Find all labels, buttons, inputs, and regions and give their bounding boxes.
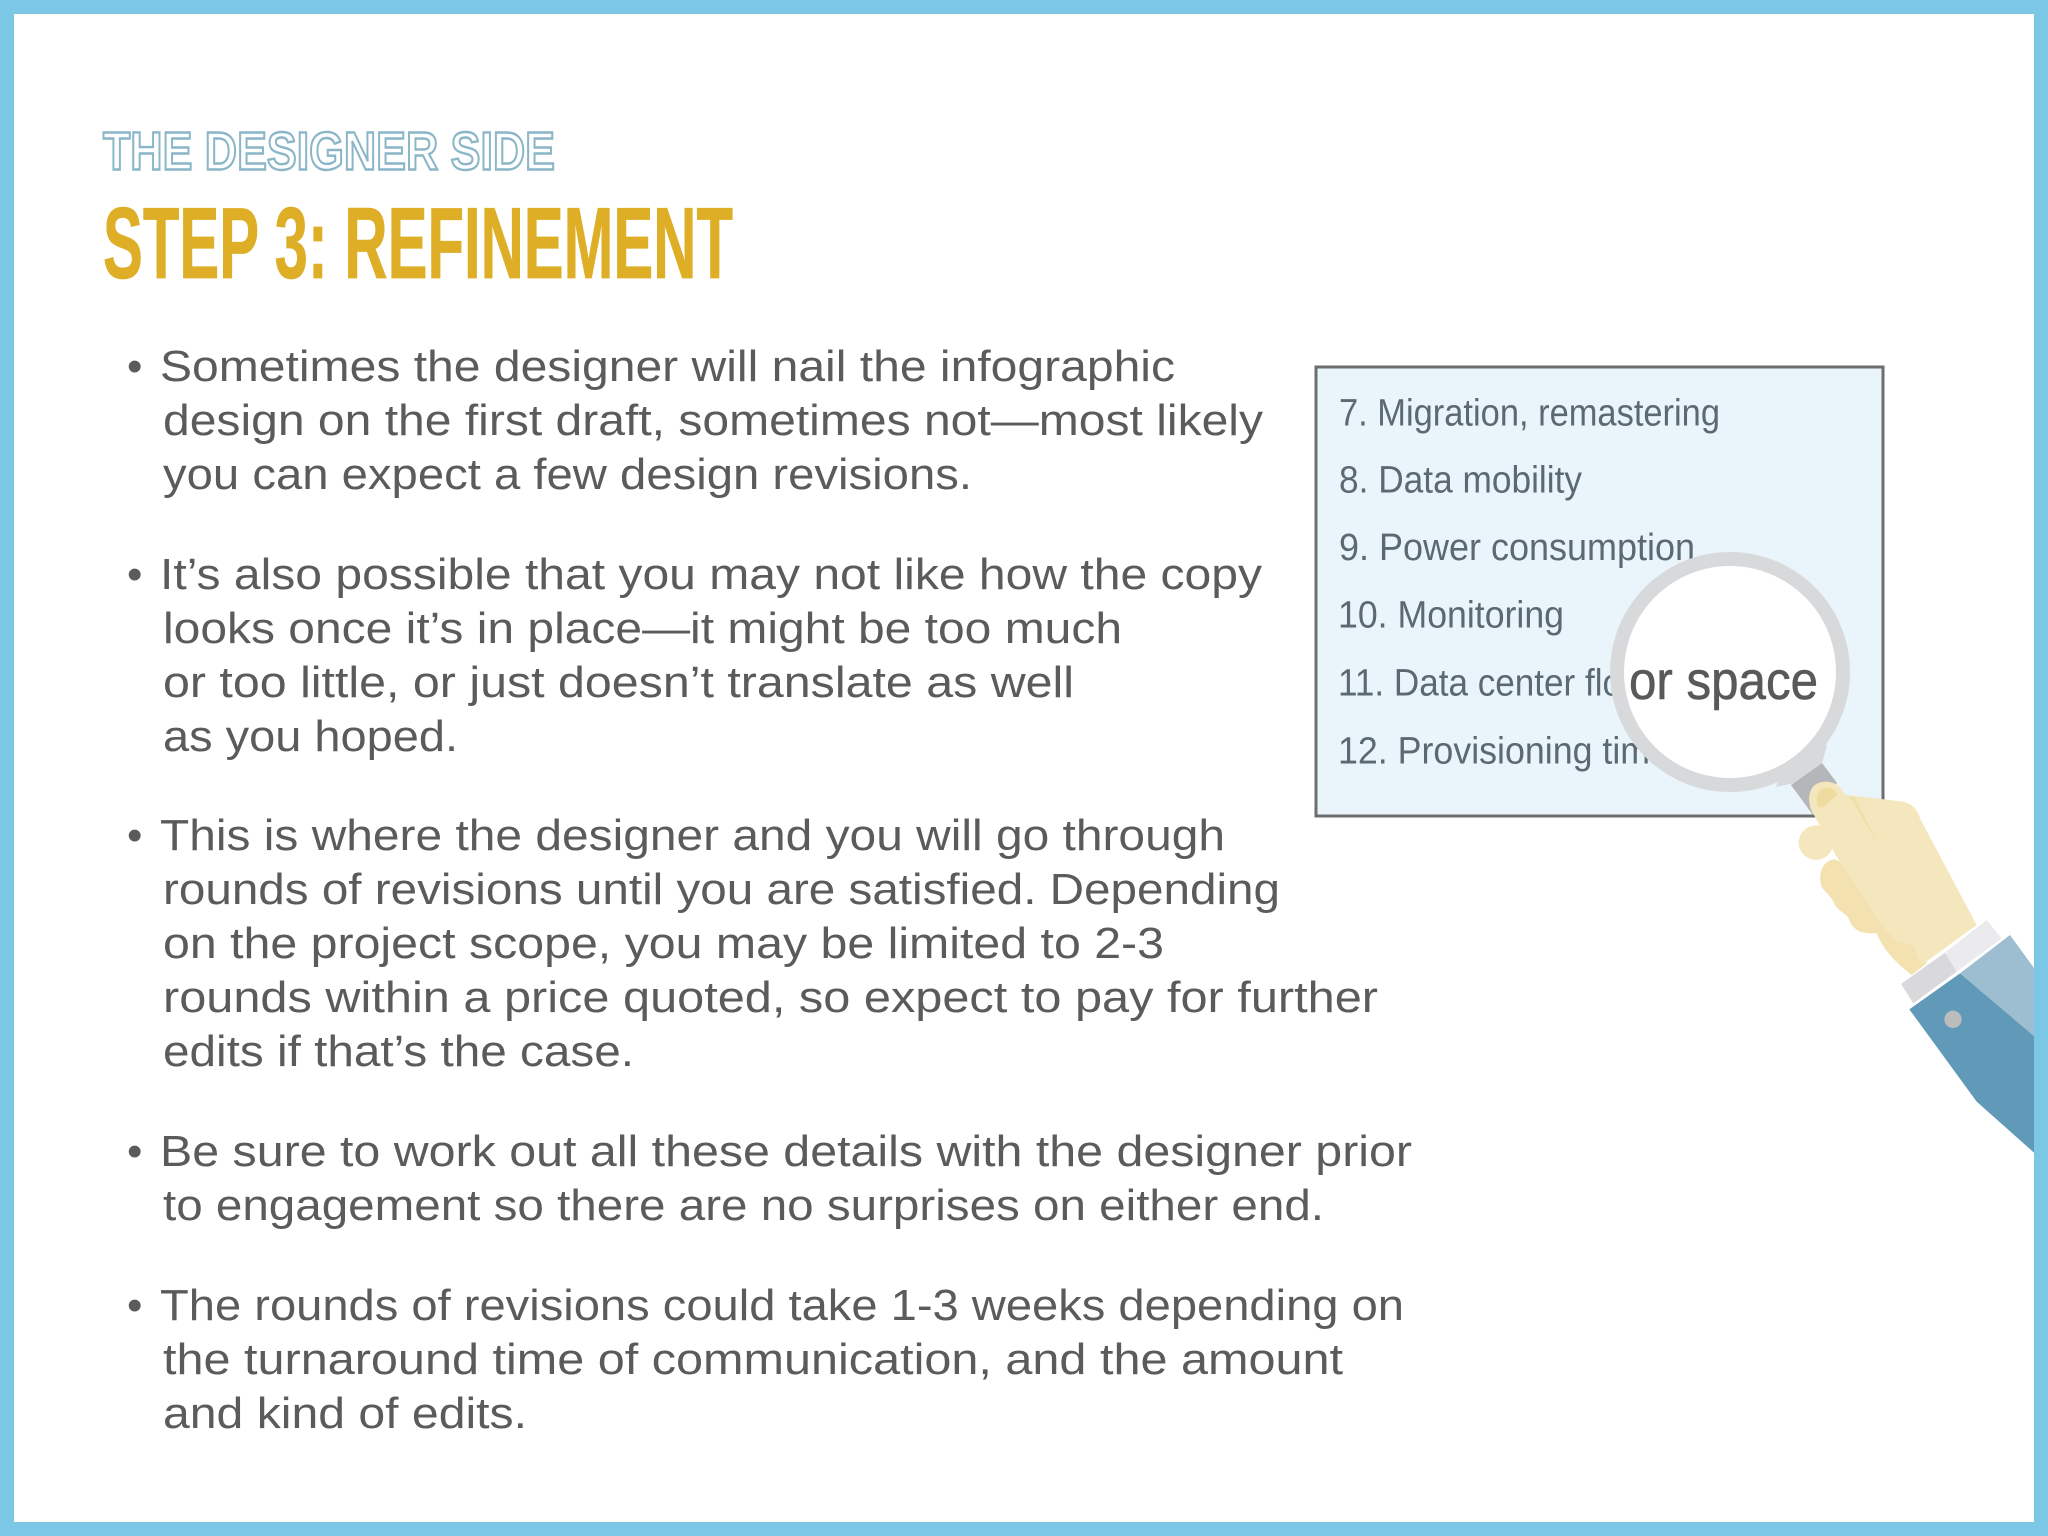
bullet text: work out details: to engagement so there are no surprises on either end. [163, 1181, 1324, 1230]
bullet text: work out details: Be sure to work out all these details with the designer prior [160, 1127, 1412, 1176]
bullet text: rounds of revisions: rounds of revisions until you are satisfied. Depending [163, 865, 1280, 914]
sleeve dark side [1909, 973, 2037, 1155]
lower fingers [1820, 859, 1927, 975]
bullet text: first draft: design on the first draft, sometimes not—most likely [163, 396, 1263, 445]
bullet text: timing: The rounds of revisions could take 1-3 weeks depending on [160, 1281, 1404, 1330]
title: step 3 refinement: STEP 3: REFINEMENT [103, 188, 733, 300]
thumb [1799, 825, 1833, 860]
list item 10: 10. Monitoring [1338, 594, 1564, 636]
magnified text: or space [1629, 651, 1818, 711]
list item 9: 9. Power consumption [1339, 527, 1695, 569]
finger crease [1849, 796, 1879, 847]
bullet text: copy in place: looks once it’s in place—it might be too much [163, 604, 1122, 653]
bullet text: copy in place [127, 550, 1262, 761]
fingernail [1817, 787, 1837, 807]
bullet text: first draft: Sometimes the designer will nail the infographic [160, 342, 1175, 391]
bullet text: rounds of revisions: on the project scope, you may be limited to 2-3 [163, 919, 1164, 968]
icon: magnifying glass [1617, 559, 1843, 815]
bullet text: timing: the turnaround time of communication, and the amount [163, 1335, 1343, 1384]
index finger [1809, 782, 1878, 860]
panel: checklist document [1316, 367, 1883, 816]
sleeve light side [1960, 935, 2037, 1038]
bullet text: rounds of revisions: • [127, 811, 142, 860]
illustration: hand and sleeve [1799, 782, 2037, 1155]
bullet text: copy in place: as you hoped. [163, 712, 458, 761]
bullet text: rounds of revisions: rounds within a price quoted, so expect to pay for further [163, 973, 1378, 1022]
list item 8: 8. Data mobility [1339, 460, 1582, 502]
bullet text: copy in place: It’s also possible that you may not like how the copy [160, 550, 1262, 599]
bullet text: work out details [127, 1127, 1412, 1230]
bullet text: rounds of revisions [127, 811, 1378, 1076]
bullet text: first draft: you can expect a few design revisions. [163, 450, 972, 499]
bullet text: copy in place: or too little, or just doesn’t translate as well [163, 658, 1074, 707]
shirt cuff [1901, 953, 1957, 1003]
heading: the designer side: THE DESIGNER SIDE [103, 122, 555, 182]
list item 7: 7. Migration, remastering [1339, 392, 1720, 434]
bullet text: timing: • [127, 1281, 142, 1330]
bullet text: work out details: • [127, 1127, 142, 1176]
bullet text: timing [127, 1281, 1404, 1438]
bullet text: timing: and kind of edits. [163, 1389, 527, 1438]
palm [1815, 795, 1977, 965]
bullet text: rounds of revisions: edits if that’s the case. [163, 1027, 634, 1076]
list item 11: 11. Data center flo [1338, 662, 1622, 704]
bullet text: first draft: • [127, 342, 142, 391]
sleeve button [1944, 1011, 1962, 1028]
bullet text: copy in place: • [127, 550, 142, 599]
bullet text: first draft [127, 342, 1263, 499]
list item 12: 12. Provisioning time [1338, 730, 1670, 772]
bullet text: rounds of revisions: This is where the designer and you will go through [160, 811, 1225, 860]
